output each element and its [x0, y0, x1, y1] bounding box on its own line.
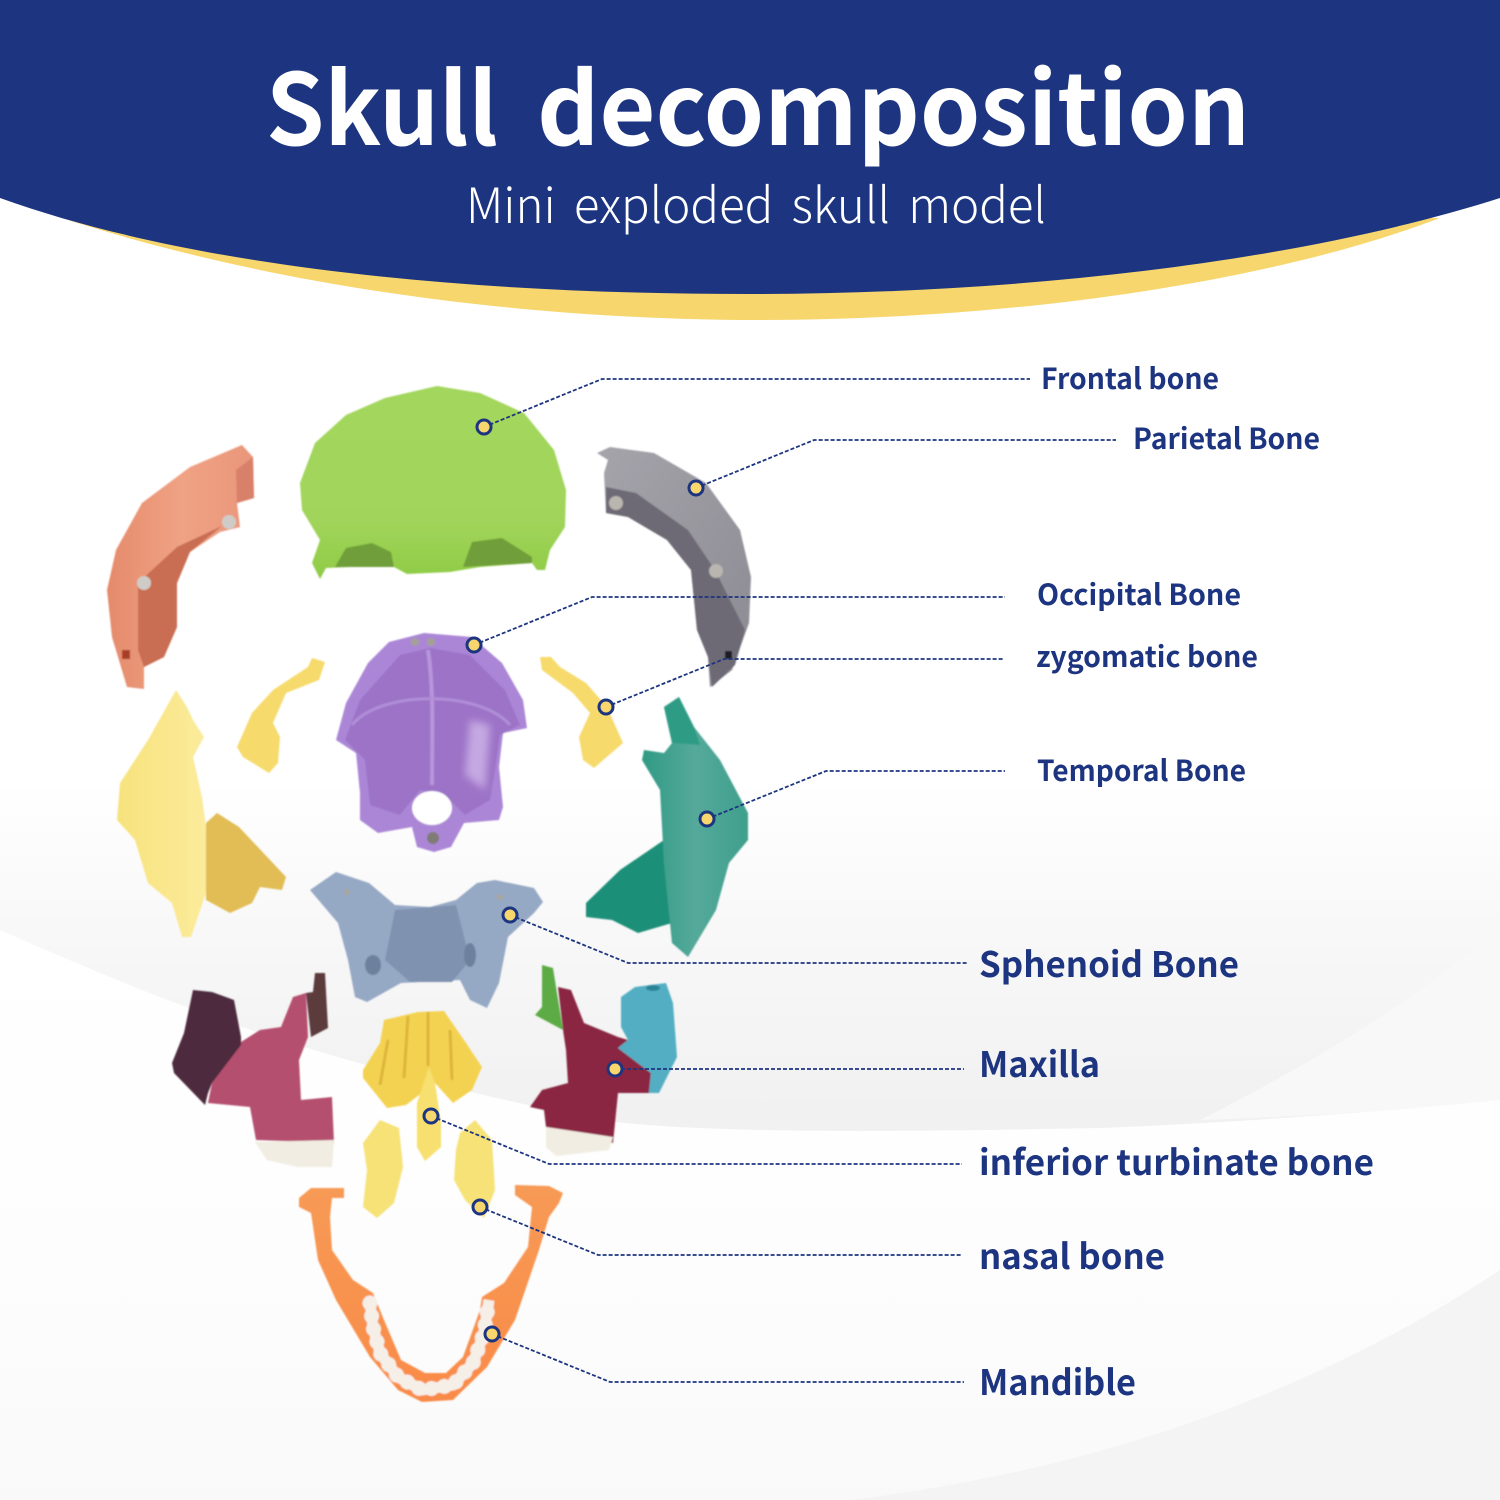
bone: nasal right — [454, 1120, 495, 1218]
title: Skull — [266, 30, 498, 174]
callout: occipital bone — [467, 572, 1241, 652]
bone: zygomatic right — [540, 657, 623, 768]
callouts — [424, 356, 1374, 1406]
bone: maxilla right — [530, 965, 677, 1156]
callout: zygomatic bone: zygomatic bone — [1036, 634, 1258, 676]
title: decomposition — [537, 30, 1250, 174]
callout: maxilla — [608, 1037, 1100, 1088]
callout: mandible: Mandible — [979, 1355, 1136, 1406]
bone: nasal left — [363, 1120, 403, 1218]
callout: sphenoid bone: Sphenoid Bone — [979, 937, 1239, 988]
bone: frontal (green) — [300, 386, 566, 579]
bone: temporal left (yellow) — [117, 690, 286, 937]
callout: temporal bone: Temporal Bone — [1037, 748, 1246, 790]
skull illustration — [107, 386, 751, 1402]
bone: inferior turbinate (conchae) — [363, 1011, 482, 1161]
bone: parietal right (grey) — [597, 447, 751, 687]
bone: parietal left (salmon) — [107, 445, 254, 689]
callout: mandible — [485, 1327, 1136, 1406]
callout: sphenoid bone — [503, 908, 1239, 988]
bone: sphenoid (blue grey) — [310, 872, 543, 1008]
callout: parietal bone: Parietal Bone — [1133, 416, 1320, 458]
navy banner — [0, 0, 1500, 294]
callout: zygomatic bone — [599, 634, 1258, 714]
bone: temporal right (teal) — [586, 697, 748, 957]
bone: occipital (purple) — [336, 633, 527, 852]
callout: occipital bone: Occipital Bone — [1037, 572, 1241, 614]
callout: frontal bone — [477, 356, 1219, 434]
callout: frontal bone: Frontal bone — [1041, 356, 1219, 398]
callout: maxilla: Maxilla — [979, 1037, 1100, 1088]
callout: nasal bone: nasal bone — [979, 1229, 1165, 1280]
bone: mandible (orange) — [299, 1185, 563, 1402]
bone: zygomatic left — [237, 658, 325, 773]
callout: temporal bone — [700, 748, 1246, 826]
subtitle: Mini exploded skull model — [466, 167, 1046, 238]
yellow accent curve — [62, 218, 1440, 320]
callout: nasal bone — [473, 1200, 1165, 1280]
callout: inferior turbinate bone: inferior turbinate bone — [979, 1135, 1374, 1186]
bone: maxilla left — [172, 973, 334, 1167]
header band — [0, 0, 1500, 320]
callout: parietal bone — [689, 416, 1320, 495]
callout: inferior turbinate bone — [424, 1109, 1374, 1186]
